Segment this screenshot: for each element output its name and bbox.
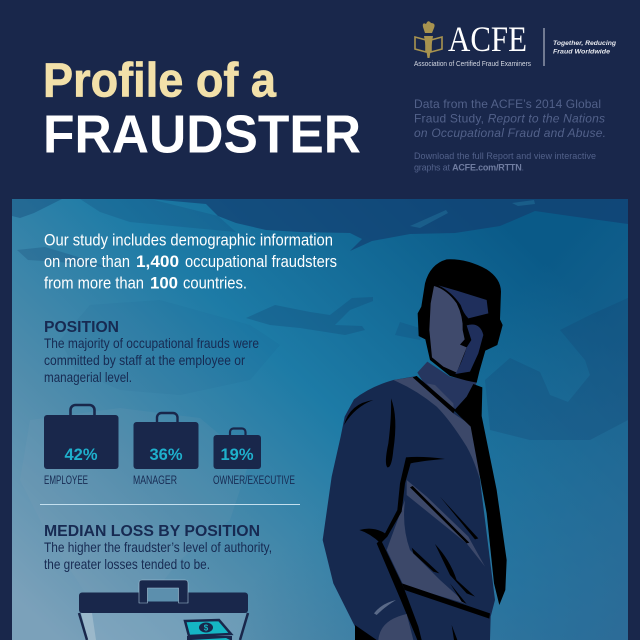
main panel: [12, 199, 628, 640]
stack of banknotes: $: [204, 624, 209, 632]
head silhouette: [418, 259, 503, 383]
download note: graphs at ACFE.com/RTTN.: [414, 162, 524, 172]
world map silhouette: [12, 199, 628, 440]
briefcase: owner/executive 19%: OWNER/EXECUTIVE: [213, 475, 295, 487]
association name: Association of Certified Fraud Examiners: [414, 61, 531, 68]
briefcase: manager 36%: [133, 413, 198, 487]
position description: committed by staff at the employee or: [44, 352, 245, 368]
light teal map details: [410, 200, 535, 228]
wordmark: ACFE: [448, 19, 527, 59]
position description: managerial level.: [44, 369, 132, 385]
title line: Profile of a: Profile of a: [43, 54, 276, 108]
intro text: occupational fraudsters: [185, 253, 337, 271]
shirt collar: [417, 362, 477, 411]
open briefcase with money: [79, 580, 248, 640]
tagline: Together, Reducing: [553, 40, 616, 47]
intro text: on more than: [44, 253, 130, 271]
briefcase lid: [79, 592, 248, 613]
cuff highlight: [374, 600, 396, 615]
position description: [44, 335, 259, 385]
intro text: countries.: [183, 274, 247, 292]
median loss description: [44, 539, 272, 572]
intro text: Our study includes demographic information: [44, 232, 333, 250]
position heading: POSITION: [44, 319, 119, 336]
lid notch: [147, 588, 179, 602]
hand: [378, 614, 413, 640]
illustration: fraudster figure: [323, 259, 507, 640]
collar line: [413, 376, 455, 413]
logo divider: [544, 28, 545, 66]
necktie: [454, 384, 507, 605]
briefcase handle: [139, 580, 188, 603]
data source text: on Occupational Fraud and Abuse.: [414, 126, 606, 140]
position description: The majority of occupational frauds were: [44, 335, 259, 351]
briefcase: employee 42%: [44, 405, 118, 487]
briefcase: owner/executive 19%: [213, 428, 295, 487]
data source text: Data from the ACFE’s 2014 Global: [414, 97, 601, 111]
briefcase: manager 36%: 36%: [149, 446, 183, 464]
download note: Download the full Report and view interactive: [414, 151, 596, 161]
briefcase: manager 36%: MANAGER: [133, 475, 177, 487]
intro text: 1,400: [136, 252, 179, 271]
panel background: [12, 199, 628, 640]
intro text: [44, 232, 337, 292]
data source text: Fraud Study, Report to the Nations: [414, 112, 605, 126]
briefcase: employee 42%: EMPLOYEE: [44, 475, 88, 487]
data source text: [414, 97, 606, 140]
icon: torch and open book: [415, 21, 442, 58]
tagline: Fraud Worldwide: [553, 48, 610, 56]
tagline: [553, 40, 616, 56]
median loss description: the greater losses tended to be.: [44, 556, 210, 572]
figure body: jacket: [323, 376, 495, 640]
briefcase interior: [81, 613, 247, 640]
jacket highlight: lapel: [393, 377, 492, 527]
intro text: 100: [150, 274, 178, 292]
jacket fold lines: [344, 398, 490, 640]
download note: [414, 151, 596, 172]
jacket grey patch: [387, 500, 467, 604]
intro text: from more than: [44, 274, 144, 292]
stack of banknotes: [185, 620, 232, 640]
briefcase: owner/executive 19%: 19%: [220, 446, 254, 464]
briefcase: employee 42%: 42%: [64, 446, 98, 464]
face light side: [429, 286, 467, 373]
title: [43, 54, 361, 164]
median loss heading: MEDIAN LOSS BY POSITION: [44, 523, 260, 540]
pale landmass, lower left: [20, 408, 250, 610]
median loss description: The higher the fraudster’s level of authority,: [44, 539, 272, 555]
jacket grey streak: [407, 480, 485, 567]
face shadow side: [438, 285, 488, 374]
title line: FRAUDSTER: FRAUDSTER: [43, 104, 361, 164]
ACFE logo: [414, 19, 616, 68]
